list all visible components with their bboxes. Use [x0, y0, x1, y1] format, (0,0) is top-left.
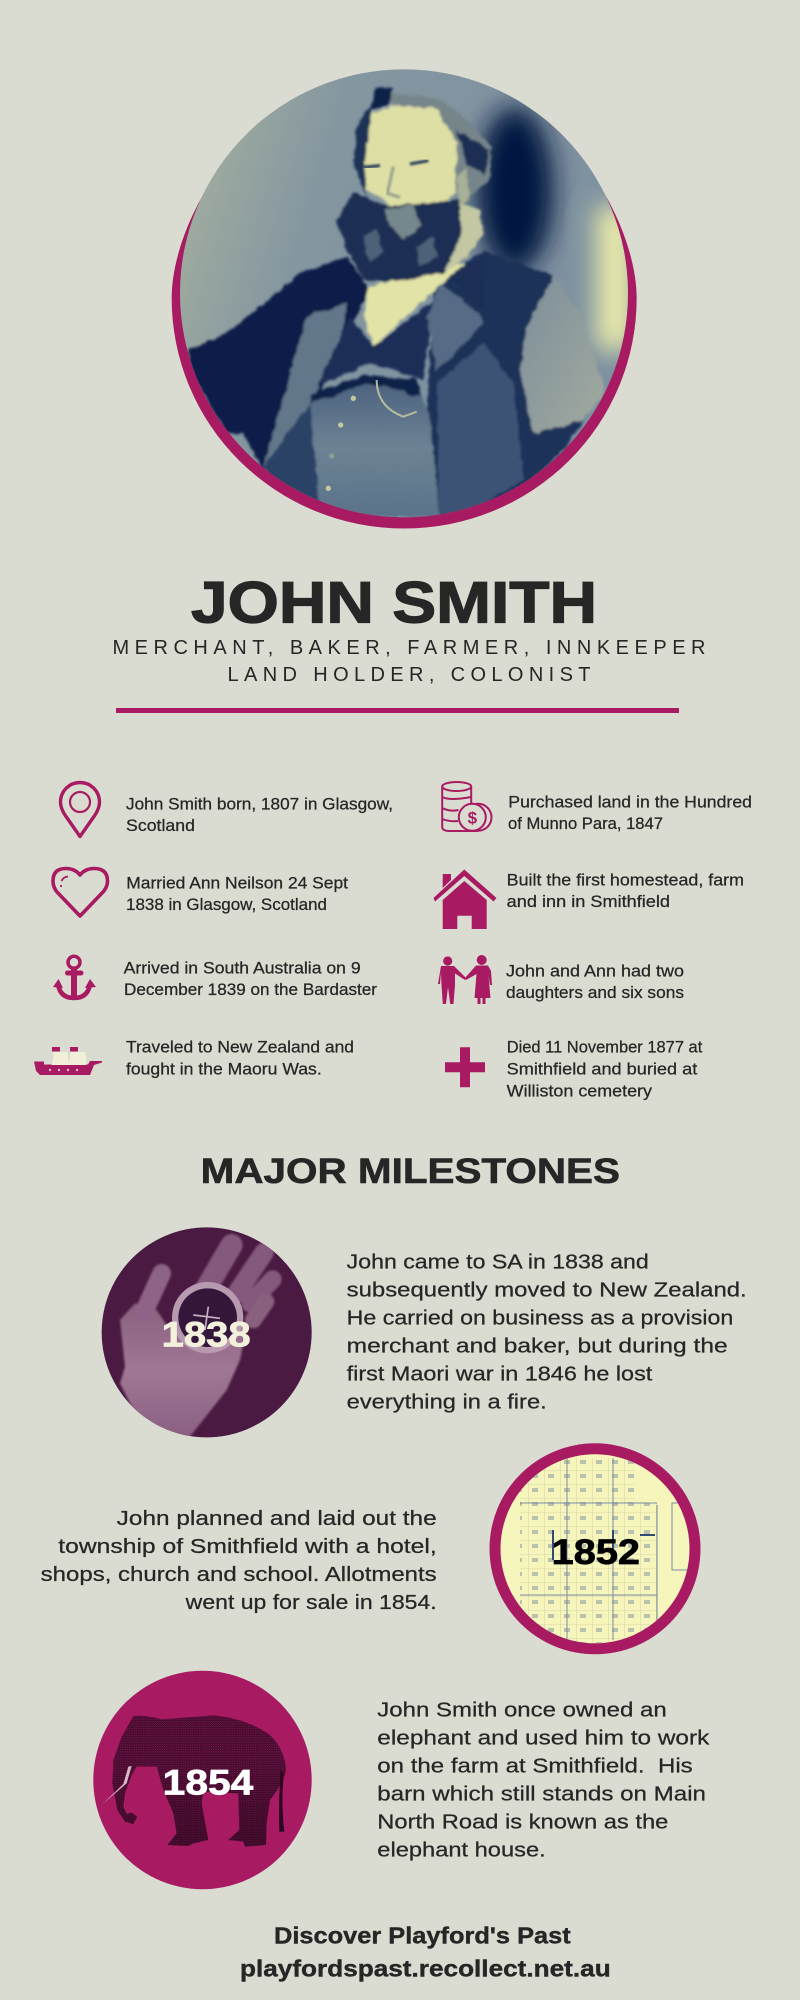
fact text: of Munno Para, 1847: [508, 815, 663, 833]
map circle: [490, 1443, 700, 1654]
fact: purchased land: [442, 782, 752, 833]
fact text: John Smith born, 1807 in Glasgow,: [126, 795, 393, 813]
milestone 1838 text: subsequently moved to New Zealand.: [347, 1279, 747, 1302]
milestone 1854 text: John Smith once owned an: [377, 1699, 667, 1722]
subtitle: [112, 637, 705, 686]
fact text: [506, 962, 684, 1002]
fact: homestead: [434, 870, 744, 929]
fact text: [508, 793, 752, 833]
milestone 1854 text: North Road is known as the: [377, 1811, 668, 1834]
milestone 1838 text: John came to SA in 1838 and: [347, 1250, 649, 1273]
subtitle: MERCHANT, BAKER, FARMER, INNKEEPER: [112, 637, 705, 659]
portrait photo: [177, 67, 633, 520]
elephant circle: [93, 1671, 312, 1889]
fact text: fought in the Maoru Was.: [126, 1060, 322, 1078]
icon: coins: $: [468, 808, 478, 828]
fact text: [126, 874, 348, 914]
footer: playfordspast.recollect.net.au: [240, 1956, 611, 1982]
fact text: daughters and six sons: [506, 984, 684, 1002]
fact text: [124, 959, 378, 999]
fact text: Traveled to New Zealand and: [126, 1038, 354, 1056]
fact: born: [60, 782, 393, 836]
fact text: Died 11 November 1877 at: [507, 1038, 703, 1056]
year label: 1854: [163, 1763, 254, 1802]
fact text: Arrived in South Australia on 9: [124, 959, 361, 977]
fact text: Williston cemetery: [507, 1082, 653, 1100]
milestone 1854 text: elephant and used him to work: [377, 1727, 710, 1750]
fact: family: [438, 955, 684, 1004]
year label: 1852: [552, 1533, 640, 1572]
icon: house: [434, 870, 496, 929]
milestone 1838 text: [347, 1250, 747, 1413]
heading: major milestones: MAJOR MILESTONES: [201, 1152, 620, 1191]
fact text: Married Ann Neilson 24 Sept: [126, 874, 348, 892]
milestone 1852: [490, 1443, 700, 1654]
milestone 1838: [100, 1227, 313, 1440]
year label: 1838: [162, 1316, 251, 1355]
fact text: [126, 795, 393, 835]
milestone 1838 text: merchant and baker, but during the: [347, 1334, 728, 1357]
icon: sailing ship: [34, 1047, 102, 1075]
icon: heart: [53, 868, 108, 916]
icon: cross: [445, 1047, 485, 1087]
fact text: [507, 871, 744, 911]
fact text: and inn in Smithfield: [507, 893, 670, 911]
fact text: John and Ann had two: [506, 962, 684, 980]
icon: map pin: [60, 782, 100, 836]
fact text: Built the first homestead, farm: [507, 871, 744, 889]
fact text: 1838 in Glasgow, Scotland: [126, 896, 327, 914]
milestone 1852 text: [41, 1507, 437, 1614]
fact text: [507, 1038, 703, 1100]
milestone 1852 text: shops, church and school. Allotments: [41, 1563, 437, 1586]
milestone 1838 text: everything in a fire.: [347, 1390, 547, 1413]
footer: Discover Playford's Past: [274, 1922, 571, 1948]
fact: married: [53, 868, 348, 916]
fact text: Smithfield and buried at: [507, 1060, 698, 1078]
milestone 1852 text: John planned and laid out the: [117, 1507, 437, 1530]
milestone 1854 text: elephant house.: [377, 1839, 546, 1862]
milestone 1854 text: [377, 1699, 710, 1862]
fact text: Scotland: [126, 817, 195, 835]
milestone 1854 text: on the farm at Smithfield. His: [377, 1755, 693, 1778]
milestone 1852 text: township of Smithfield with a hotel,: [58, 1535, 437, 1558]
milestone 1854 text: barn which still stands on Main: [377, 1783, 706, 1806]
milestone 1852 text: went up for sale in 1854.: [185, 1591, 437, 1614]
fact text: December 1839 on the Bardaster: [124, 981, 378, 999]
icon: anchor: [53, 956, 96, 999]
subtitle: LAND HOLDER, COLONIST: [228, 664, 590, 686]
footer: [240, 1922, 611, 1982]
icon: coins: [442, 782, 492, 831]
fact: New Zealand: [34, 1038, 354, 1078]
fact text: Purchased land in the Hundred: [508, 793, 752, 811]
milestone 1838 text: He carried on business as a provision: [347, 1306, 733, 1329]
compass photo circle: [100, 1227, 313, 1440]
portrait of John Smith: [172, 67, 637, 528]
fact: died: [445, 1038, 703, 1100]
milestone 1854: [93, 1671, 312, 1889]
title: JOHN SMITH: [191, 570, 597, 636]
milestone 1838 text: first Maori war in 1846 he lost: [347, 1362, 653, 1385]
portrait magenta crescent: [172, 173, 637, 528]
icon: elephant: [103, 1715, 286, 1847]
fact text: [126, 1038, 354, 1078]
fact: arrived: [53, 956, 378, 999]
icon: couple holding hands: [438, 955, 492, 1004]
magenta rule: [116, 708, 679, 713]
